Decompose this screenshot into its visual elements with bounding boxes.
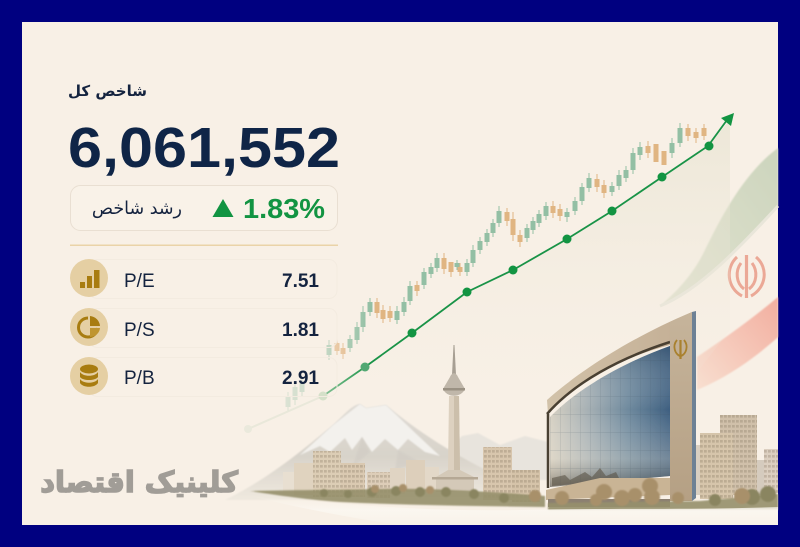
building: podium [546,478,670,500]
chart: candlesticks [288,123,704,412]
index value: 6,061,552 [68,116,340,180]
icon: up triangle [212,199,234,217]
growth label: رشد شاخص [92,199,182,219]
metric row: P/B [70,357,337,396]
city skyline left [283,447,540,502]
metric row: P/S: P/S [124,320,155,341]
orange candle bodies [337,128,704,354]
chart: trend line with arrow [244,113,734,433]
green candle wicks [288,123,680,412]
icon: coin stack [80,364,98,387]
metric row: P/S [70,308,337,348]
green candle bodies [288,128,680,407]
divider [70,244,338,246]
city skyline right [695,415,778,499]
icon: gold building emblem [674,340,687,359]
central bank building [546,311,696,507]
trees [250,478,778,511]
tower landmark [432,345,478,492]
icon: flag emblem [729,255,764,298]
mountain range [225,404,548,500]
watermark: کلینیک اقتصاد [40,465,238,499]
building: curved stone cornice [547,312,692,414]
building: stone column [670,312,692,501]
metric row: P/B: 2.91 [282,368,319,389]
icon: pie chart [79,316,100,337]
flag: green and red ribbons with emblem [660,148,778,390]
building: glass facade [550,346,670,487]
orange candle wicks [337,124,704,359]
metric row: P/E: 7.51 [282,271,319,292]
metric row: P/B: P/B [124,368,155,389]
foreground mist [250,496,778,525]
growth pill [70,186,338,230]
metric row: P/E [70,259,337,298]
growth value: 1.83% [243,193,325,224]
icon: bars [80,270,100,288]
arrowhead [721,113,734,126]
chart: shaded area under trend line [365,120,730,420]
metric row: P/S: 1.81 [282,320,319,341]
metric row: P/E: P/E [124,271,155,292]
heading: total index label: شاخص کل [68,82,147,100]
